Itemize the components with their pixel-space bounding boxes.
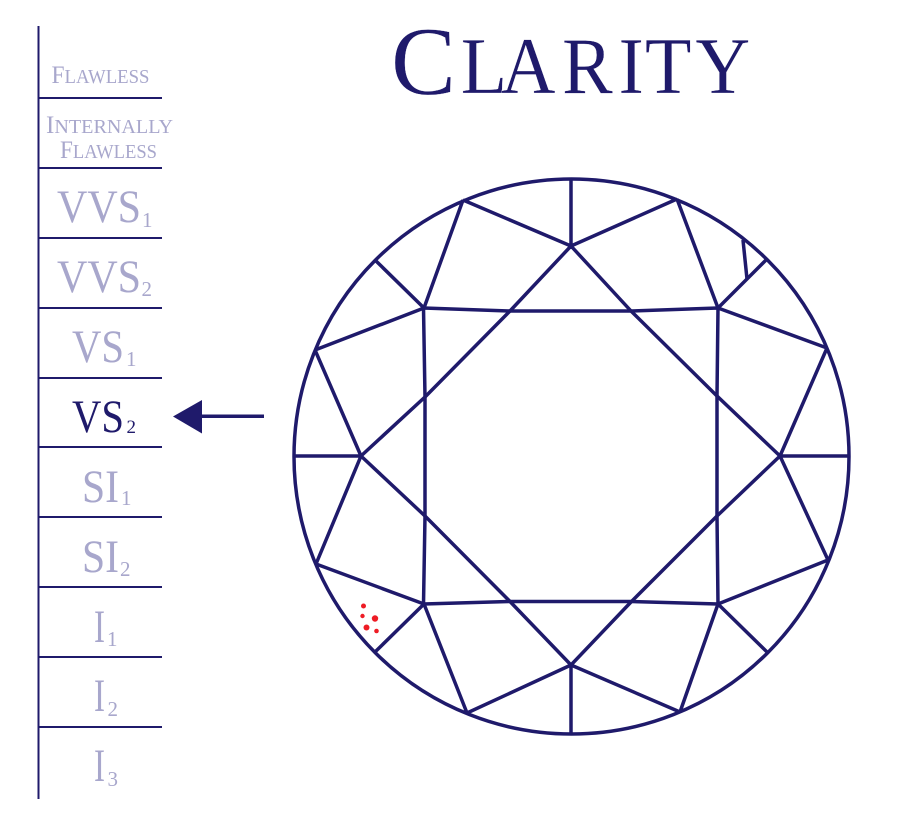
grade: VS2 (selected): 2	[126, 417, 136, 438]
grade: VVS1: 1	[142, 208, 152, 232]
grade: SI2: SI	[82, 531, 119, 583]
grade: SI1: 1	[121, 486, 132, 510]
grade: I1	[94, 601, 118, 653]
grade: I3	[94, 740, 118, 792]
title	[391, 8, 750, 116]
title: C	[391, 8, 456, 116]
table diagonal square	[361, 246, 780, 665]
grade: I3: 3	[108, 767, 118, 791]
grade: Flawless: FLAWLESS	[52, 62, 150, 89]
grade: Internally Flawless: INTERNALLY	[46, 112, 173, 139]
grade: SI1: SI	[82, 461, 119, 513]
grade: VVS2: VVS	[57, 251, 141, 303]
scale axis and dividers	[38, 26, 162, 799]
grade: VS2 (selected): VS	[72, 391, 124, 443]
grade: I3: I	[94, 740, 105, 792]
red inclusions	[360, 604, 379, 633]
arrow pointing to VS2	[173, 400, 264, 434]
grade: VS1: 1	[126, 347, 136, 371]
grade: VVS1: VVS	[57, 181, 141, 233]
grade: I2: 2	[108, 697, 118, 721]
title: LARITY	[461, 21, 750, 110]
grade: VS1: VS	[72, 321, 124, 373]
grade: VVS2: 2	[142, 277, 152, 301]
clarity scale	[38, 26, 173, 799]
diamond facet diagram	[294, 179, 849, 734]
grade: Internally Flawless	[46, 112, 173, 164]
grade: Internally Flawless: FLAWLESS	[60, 137, 157, 164]
grade: I2	[94, 670, 118, 722]
grade: I1: I	[94, 601, 105, 653]
grade: I2: I	[94, 670, 105, 722]
grade: I1: 1	[107, 627, 118, 651]
feather flaw	[743, 240, 747, 279]
table outline	[424, 308, 718, 604]
grade: SI2: 2	[120, 557, 130, 581]
